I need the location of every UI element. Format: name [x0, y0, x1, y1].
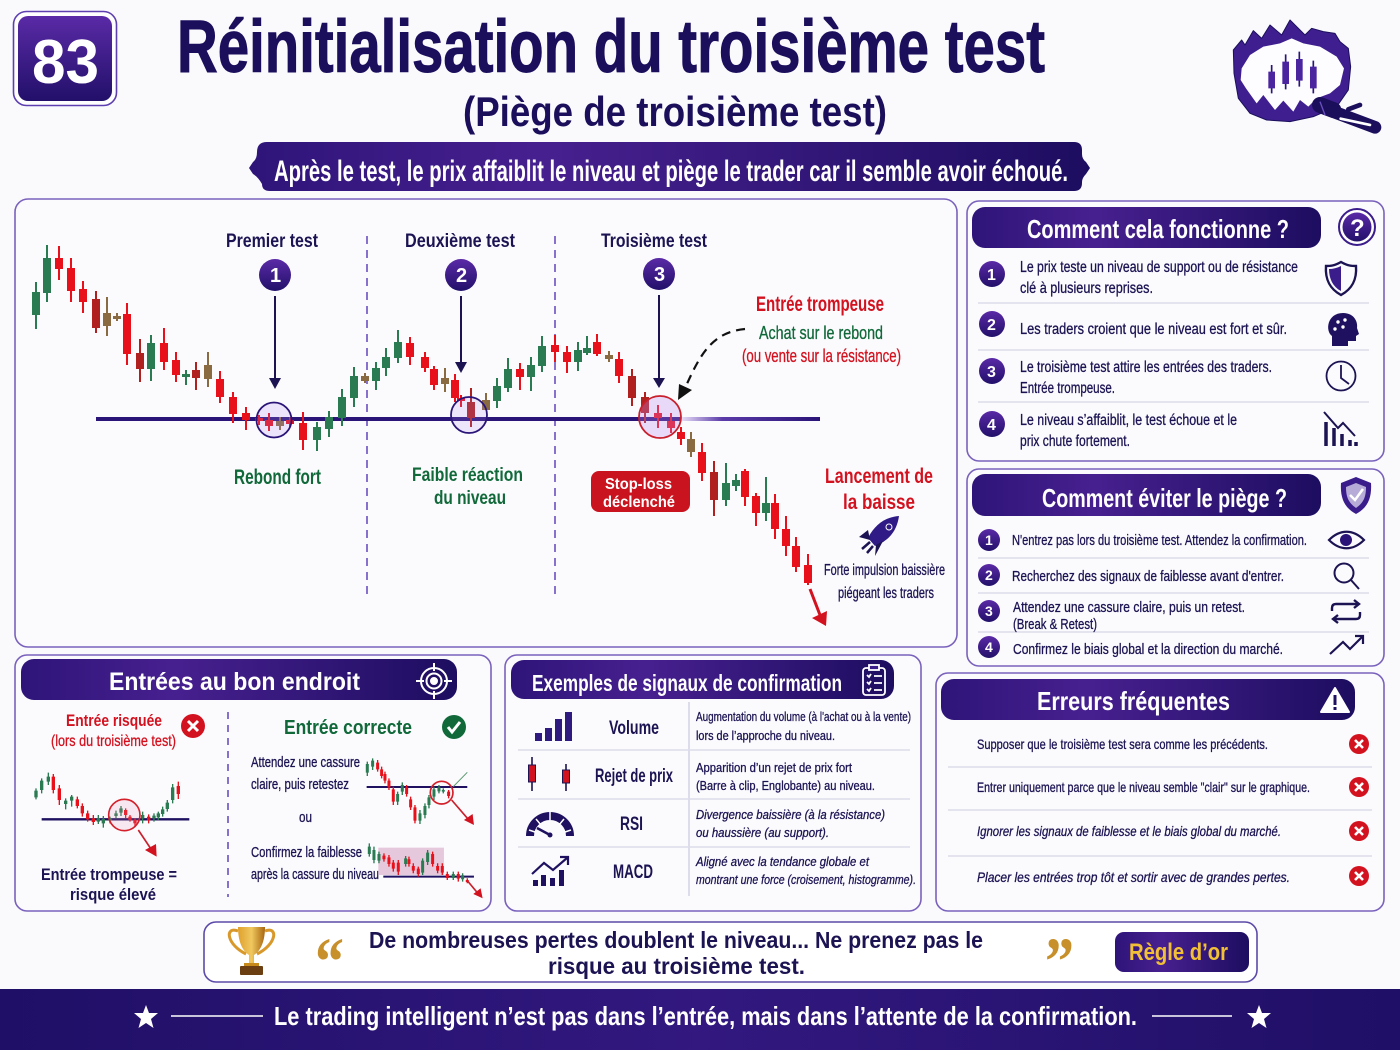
mini chart: break and retest — [367, 758, 474, 825]
row: MACD: Aligné avec la tendance globale et — [695, 854, 870, 869]
tip 4 — [978, 636, 1363, 658]
stop-loss tag: déclenché — [603, 494, 675, 511]
first test label: 1 — [270, 265, 281, 287]
heading: Exemples de signaux de confirmation — [532, 670, 842, 696]
icon: checklist — [863, 665, 885, 695]
mistake 1: Supposer que le troisième test sera comme les précédents. — [977, 736, 1268, 752]
mini chart: risky — [36, 773, 189, 857]
heading: Erreurs fréquentes — [1037, 686, 1230, 716]
stop-loss tag: Stop-loss — [605, 476, 672, 493]
step 2 — [979, 311, 1359, 346]
title: Réinitialisation du troisième test — [177, 5, 1045, 88]
step 1: Le prix teste un niveau de support ou de résistance — [1020, 259, 1298, 276]
correct entry: claire, puis retestez — [251, 776, 349, 793]
footer banner: Le trading intelligent n’est pas dans l’entrée, mais dans l’attente de la confirmation. — [274, 1001, 1137, 1031]
icon: target — [416, 663, 452, 699]
icon: falling chart — [1324, 412, 1356, 446]
callout: downtrend launch — [824, 465, 945, 602]
panel: how to avoid the trap — [967, 469, 1384, 666]
stop-loss tag — [591, 471, 690, 512]
quote text: risque au troisième test. — [548, 953, 805, 979]
row: MACD: montrant une force (croisement, histogramme). — [696, 872, 916, 887]
tip 1: N'entrez pas lors du troisième test. Attendez la confirmation. — [1012, 532, 1307, 549]
quote text: De nombreuses pertes doublent le niveau... Ne prenez pas le — [369, 927, 983, 953]
quote text — [369, 927, 983, 979]
panel: good entries — [15, 655, 491, 911]
row: price rejection: Rejet de prix — [595, 766, 673, 787]
row: MACD — [532, 854, 916, 887]
step 1: clé à plusieurs reprises. — [1020, 280, 1153, 297]
heading — [941, 679, 1355, 720]
correct entry: ou — [299, 809, 312, 826]
icon: right star — [1247, 1005, 1271, 1028]
icon: question: ? — [1350, 215, 1365, 242]
candlesticks — [36, 245, 808, 585]
risky entry: Entrée trompeuse = — [41, 865, 177, 884]
row: price rejection: (Barre à clip, Englobante) au niveau. — [696, 778, 875, 793]
heading: Comment cela fonctionne ? — [1027, 214, 1289, 244]
step 2: 2 — [987, 317, 996, 334]
icon: left star — [134, 1005, 158, 1028]
second test label — [405, 231, 523, 509]
correct entry: Confirmez la faiblesse — [251, 844, 362, 861]
risky entry: (lors du troisième test) — [51, 733, 176, 750]
golden rule box — [204, 922, 1257, 999]
icon: volume bars — [535, 712, 572, 741]
row: volume: Augmentation du volume (à l'achat ou à la vente) — [696, 709, 911, 724]
first test label: Premier test — [226, 231, 319, 252]
icon: repeat arrows — [1332, 600, 1360, 623]
third test label: 3 — [654, 264, 665, 286]
correct entry: Entrée correcte — [284, 717, 412, 739]
tip 2: 2 — [985, 567, 993, 583]
icon: rocket — [859, 516, 899, 556]
callout: downtrend launch: Forte impulsion baissière — [824, 562, 945, 579]
heading — [21, 659, 457, 700]
row: price rejection: Apparition d’un rejet de prix fort — [696, 760, 852, 775]
step 4: 4 — [987, 417, 996, 434]
tip 1: 1 — [985, 532, 993, 548]
callout: misleading entry: Entrée trompeuse — [756, 293, 884, 316]
heading: Entrées au bon endroit — [109, 668, 361, 696]
golden rule button — [1115, 932, 1249, 972]
callout: downtrend launch: piégeant les traders — [838, 585, 934, 602]
third test label — [601, 231, 708, 438]
step 2: Les traders croient que le niveau est fort et sûr. — [1020, 321, 1287, 338]
closing quote mark: ” — [1045, 923, 1074, 999]
tip 2 — [978, 564, 1359, 589]
footer banner — [0, 989, 1400, 1050]
tip 3: (Break & Retest) — [1013, 616, 1097, 633]
icon: shield check — [1341, 477, 1371, 514]
correct entry: après la cassure du niveau — [251, 866, 379, 883]
step 3: 3 — [987, 364, 996, 381]
second test label: Deuxième test — [405, 231, 516, 252]
row: volume: Volume — [609, 718, 659, 739]
step 3: Le troisième test attire les entrées des traders. — [1020, 359, 1272, 376]
callout: misleading entry — [678, 293, 901, 400]
tip 3: 3 — [985, 603, 993, 619]
tip 4: Confirmez le biais global et la direction du marché. — [1013, 641, 1283, 658]
tip 3 — [978, 599, 1360, 633]
first test label — [226, 231, 321, 489]
correct entry — [251, 715, 483, 898]
icon: warning — [1321, 688, 1349, 712]
heading — [511, 660, 894, 699]
icon: bear trap with candles — [1233, 20, 1375, 127]
icon: question — [1339, 209, 1375, 245]
icon: magnifier — [1334, 564, 1359, 589]
icon: clock — [1326, 362, 1356, 390]
icon: rejection candles — [528, 757, 570, 791]
risky entry: risque élevé — [70, 885, 156, 904]
row: volume — [535, 709, 911, 743]
risky entry — [36, 711, 205, 904]
tip 2: Recherchez des signaux de faiblesse avant d'entrer. — [1012, 568, 1284, 585]
icon: rising chart — [532, 857, 568, 886]
row: MACD: MACD — [613, 862, 653, 883]
arrow: price falling — [810, 589, 827, 626]
second test label: 2 — [456, 265, 467, 287]
row: volume: lors de l’approche du niveau. — [696, 728, 835, 743]
step 3: Entrée trompeuse. — [1020, 380, 1115, 397]
mistake 3: Ignorer les signaux de faiblesse et le biais global du marché. — [977, 823, 1281, 839]
panel: confirmation signals — [505, 655, 921, 911]
row: RSI — [529, 807, 885, 840]
opening quote mark: “ — [315, 923, 344, 999]
step 3 — [979, 358, 1356, 397]
support level line — [96, 417, 820, 421]
subtitle: (Piège de troisième test) — [463, 88, 887, 135]
icon: shield — [1326, 262, 1356, 295]
icon: gauge — [529, 812, 571, 838]
number badge 83: 83 — [32, 28, 99, 97]
tip 3: Attendez une cassure claire, puis un retest. — [1013, 599, 1245, 616]
panel: common mistakes — [936, 673, 1384, 911]
row: price rejection — [528, 757, 875, 793]
panel: main chart — [15, 199, 957, 647]
icon: eye — [1329, 532, 1364, 548]
tip 1 — [978, 529, 1364, 551]
second test label: Faible réaction — [412, 465, 523, 486]
mistake 4: Placer les entrées trop tôt et sortir avec de grandes pertes. — [977, 869, 1290, 885]
icon: trophy — [229, 927, 274, 975]
heading: Comment éviter le piège ? — [1042, 483, 1287, 513]
callout: misleading entry: Achat sur le rebond — [759, 323, 883, 343]
golden rule button: Règle d’or — [1129, 939, 1228, 966]
callout: misleading entry: (ou vente sur la résistance) — [742, 346, 901, 366]
step 1: 1 — [987, 267, 996, 284]
callout: downtrend launch: la baisse — [843, 491, 915, 514]
callout: downtrend launch: Lancement de — [825, 465, 933, 488]
row: RSI: RSI — [620, 814, 643, 835]
heading — [972, 207, 1321, 248]
icon: head — [1328, 313, 1359, 346]
step 4: prix chute fortement. — [1020, 433, 1130, 450]
step 4 — [979, 411, 1356, 450]
panel: how it works — [967, 201, 1384, 461]
icon: rising trend — [1330, 636, 1363, 654]
risky entry: Entrée risquée — [66, 711, 162, 730]
mini chart: confirm weakness — [369, 843, 483, 898]
correct entry: Attendez une cassure — [251, 754, 360, 771]
step 1 — [979, 259, 1356, 297]
row: RSI: Divergence baissière (à la résistance) — [696, 807, 885, 822]
first test label: Rebond fort — [234, 466, 321, 489]
heading — [972, 474, 1321, 516]
number badge 83 — [14, 12, 116, 106]
tip 4: 4 — [985, 639, 993, 655]
banner: definition — [249, 142, 1090, 191]
second test label: du niveau — [434, 488, 506, 509]
step 4: Le niveau s’affaiblit, le test échoue et le — [1020, 412, 1237, 429]
third test label: Troisième test — [601, 231, 708, 252]
row: RSI: ou haussière (au support). — [696, 825, 829, 840]
